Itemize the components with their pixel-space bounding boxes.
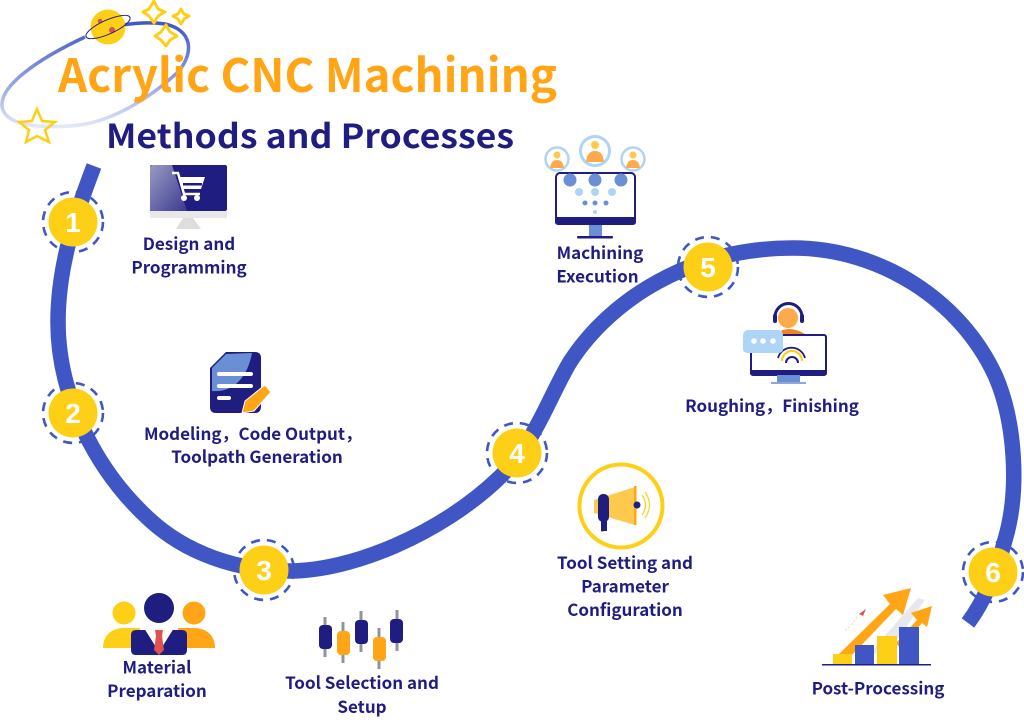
decoration: orbit, planet and stars [2,1,189,142]
label: machining execution: Execution [556,262,639,288]
step marker 2 [43,383,103,443]
subtitle: Methods and Processes [106,110,514,158]
step marker 3: 3 [256,555,272,586]
step marker 2: 2 [65,398,81,429]
label: machining execution: Machining [557,239,643,264]
label: tool selection: Setup [337,693,387,718]
step marker 1 [43,192,103,252]
step marker 5 [678,237,738,297]
label: tool selection: Tool Selection and [285,669,439,694]
process curve [58,166,1014,623]
label: material preparation: Material [123,654,191,678]
step marker 4 [487,423,547,483]
icon: megaphone [580,464,662,548]
step marker 3 [234,540,294,600]
step marker 1: 1 [65,207,81,238]
label: tool setting: Tool Setting and [557,549,693,574]
label: tool setting: Configuration [567,596,683,621]
label: design and programming: Programming [131,254,247,278]
label: material preparation: Preparation [107,677,207,702]
icon: users and monitor [546,136,644,238]
icon: document and pencil [210,352,271,413]
label: tool setting: Parameter [581,572,669,598]
icon: tool candlesticks [319,610,403,669]
label: roughing and finishing: Roughing，Finishing [685,392,859,417]
icon: growth chart with arrows [822,588,932,666]
label: modeling: Modeling，Code Output， [144,420,362,445]
icon: operator with headset and monitor [743,304,827,384]
step marker 5: 5 [700,252,716,283]
step marker 6: 6 [985,557,1001,588]
label: design and programming: Design and [143,230,235,255]
title: Acrylic CNC Machining [57,40,557,106]
step marker 4: 4 [509,438,525,469]
label: modeling: Toolpath Generation [171,443,343,468]
label: post-processing: Post-Processing [812,674,944,700]
step marker 6 [963,542,1023,602]
icon: shopping cart monitor [150,165,227,229]
icon: team of people [103,593,215,655]
